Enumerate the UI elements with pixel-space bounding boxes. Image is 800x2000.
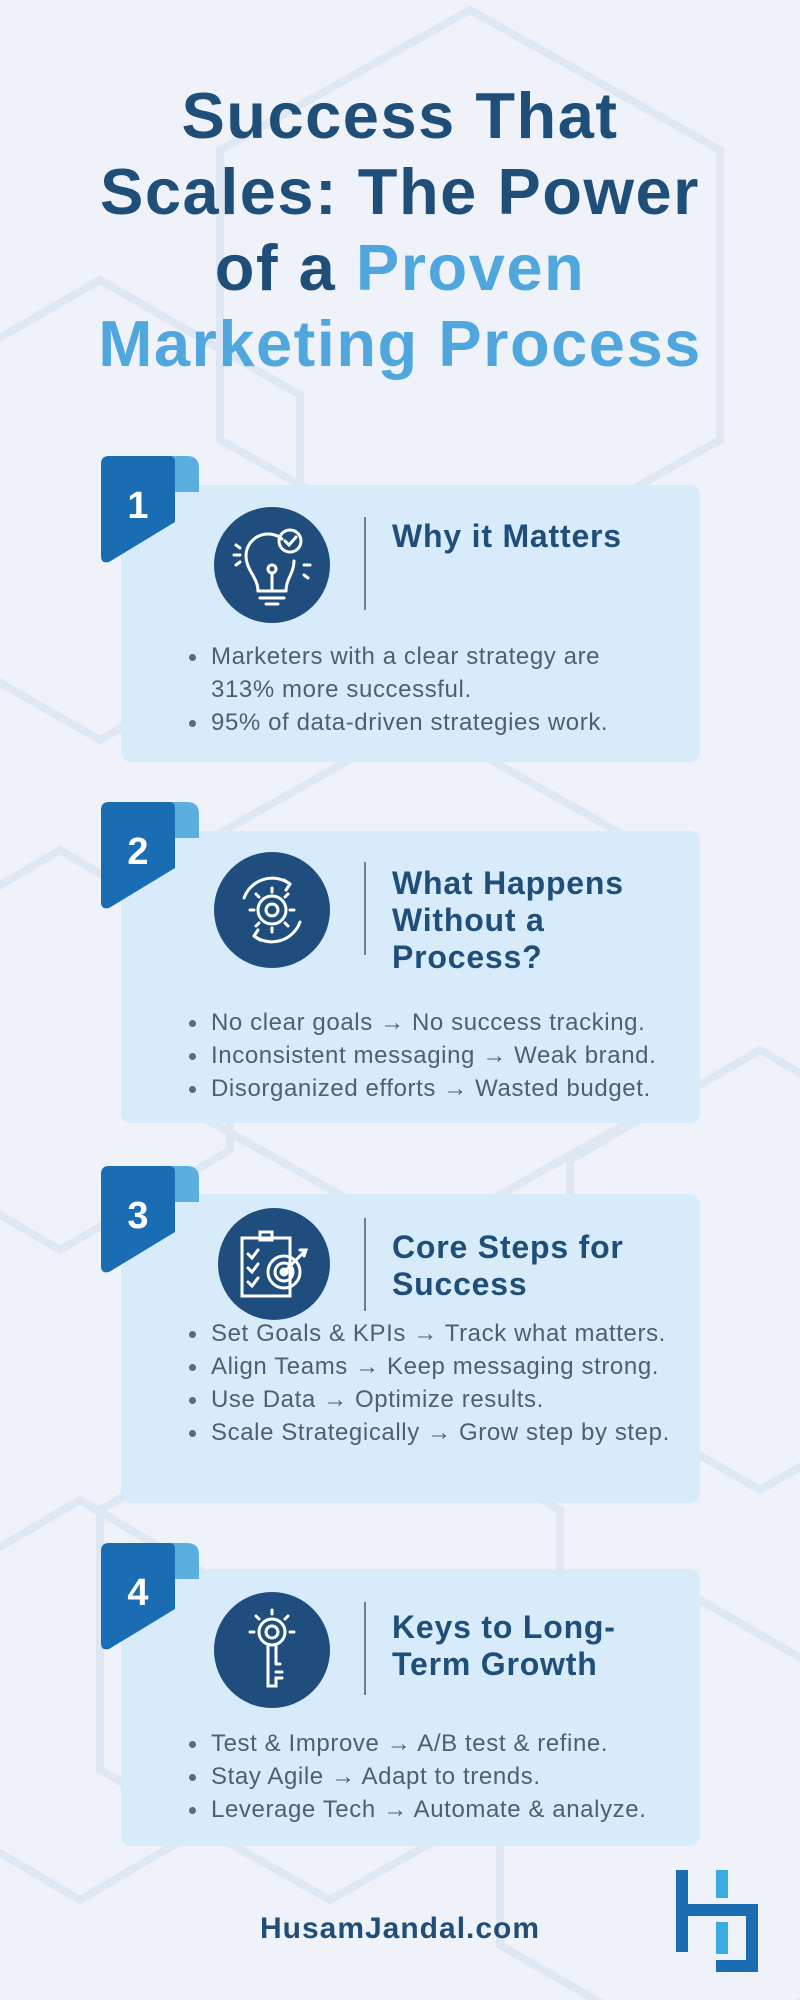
card background (121, 1194, 700, 1503)
tab number 4: 4 (127, 1572, 149, 1614)
divider (364, 1218, 366, 1311)
heading: Core Steps for (392, 1229, 624, 1265)
tab number 3: 3 (127, 1195, 149, 1237)
tab number 2 (101, 802, 199, 908)
panel: 3 core steps (101, 1166, 700, 1503)
bullets: Disorganized efforts → Wasted budget. (211, 1075, 651, 1102)
tab number 3 (101, 1166, 199, 1272)
footer website: HusamJandal.com (260, 1912, 540, 1945)
card background (121, 485, 700, 762)
heading: Success (392, 1266, 527, 1302)
title (98, 79, 702, 380)
bullets: Leverage Tech → Automate & analyze. (211, 1796, 646, 1823)
heading: What Happens (392, 865, 624, 901)
title: Scales: The Power (100, 155, 700, 228)
tab number 2: 2 (127, 831, 149, 873)
card background (121, 1569, 700, 1846)
divider (364, 862, 366, 955)
bullets: Align Teams → Keep messaging strong. (211, 1353, 659, 1380)
icon: key (214, 1592, 330, 1708)
bullets (189, 1320, 670, 1446)
panel: 1 why it matters (101, 456, 700, 762)
heading: Why it Matters (392, 518, 622, 554)
bullets: Stay Agile → Adapt to trends. (211, 1763, 541, 1790)
heading (392, 865, 624, 975)
bullets: Use Data → Optimize results. (211, 1386, 544, 1413)
icon: gear cycle (214, 852, 330, 968)
title: Marketing Process (98, 307, 702, 380)
panel: 2 without a process (101, 802, 700, 1123)
bullets (189, 1009, 656, 1102)
bullets (189, 1730, 646, 1823)
heading: Keys to Long- (392, 1609, 616, 1645)
card background (121, 831, 700, 1123)
heading: Process? (392, 939, 542, 975)
bullets: Marketers with a clear strategy are 313% more successful. (211, 643, 600, 703)
bullets (189, 643, 608, 736)
divider (364, 1602, 366, 1695)
heading: Term Growth (392, 1646, 598, 1682)
heading: Without a (392, 902, 545, 938)
bullets: Inconsistent messaging → Weak brand. (211, 1042, 656, 1069)
logo HJ (676, 1870, 758, 1972)
heading (392, 1229, 624, 1302)
title: of a Proven (215, 231, 585, 304)
tab number 1: 1 (127, 485, 149, 527)
bullets: 95% of data-driven strategies work. (211, 709, 608, 736)
bullets: Set Goals & KPIs → Track what matters. (211, 1320, 666, 1347)
icon: lightbulb (214, 507, 330, 623)
bullets: Test & Improve → A/B test & refine. (211, 1730, 608, 1757)
tab number 4 (101, 1543, 199, 1650)
bullets: No clear goals → No success tracking. (211, 1009, 645, 1036)
tab number 1 (101, 456, 199, 562)
panel: 4 long-term growth (101, 1543, 700, 1846)
heading (392, 1609, 616, 1682)
divider (364, 517, 366, 610)
bullets: Scale Strategically → Grow step by step. (211, 1419, 670, 1446)
icon: clipboard target (218, 1208, 330, 1320)
title: Success That (181, 79, 619, 152)
